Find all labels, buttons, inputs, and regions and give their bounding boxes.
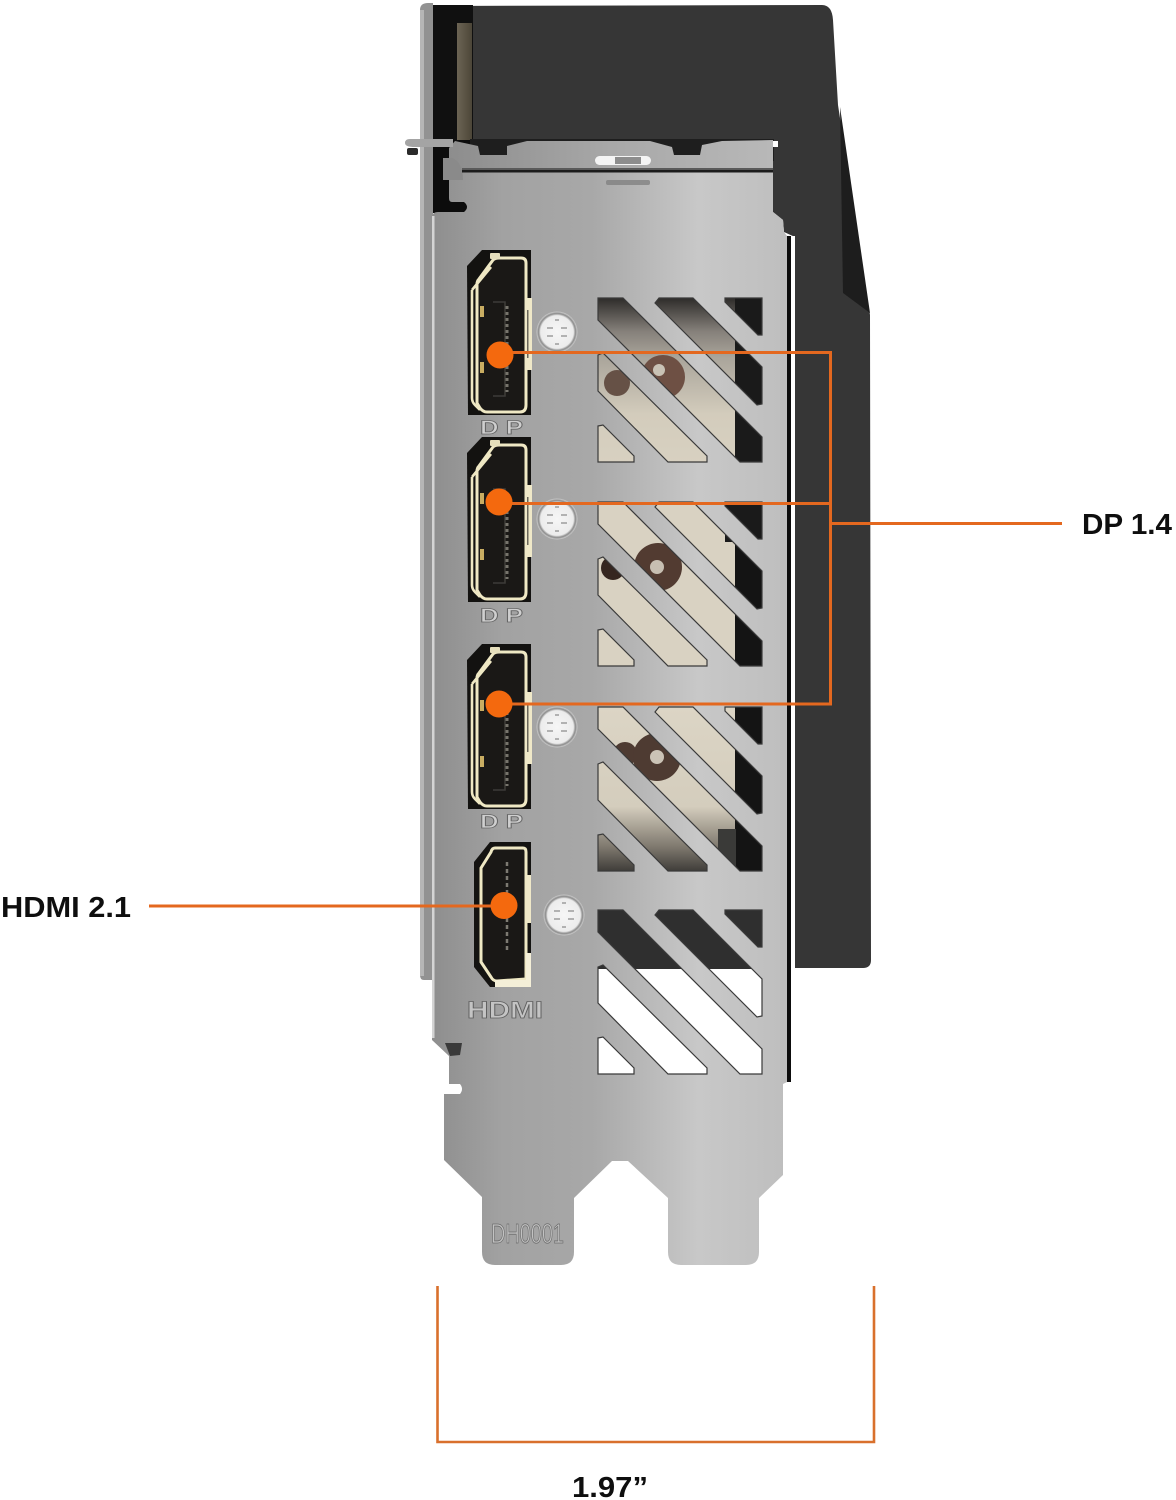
callout: HDMI 2.1 leader line and dot [149, 892, 518, 919]
engraved label DP 3: D P [480, 812, 523, 833]
engraved label HDMI: HDMI [467, 997, 543, 1024]
screw 2 [536, 498, 578, 540]
engraved label DP 1: D P [480, 418, 523, 439]
bracket top lip [405, 139, 778, 185]
graphics card cooler body [432, 5, 871, 968]
vent group 3 [596, 707, 765, 873]
label: DP 1.4: DP 1.4 [1082, 509, 1172, 541]
vent group 2 [596, 502, 765, 668]
engraved mark near left edge [445, 1043, 462, 1056]
vent group 4 [596, 910, 766, 1076]
DisplayPort connector 3 [467, 644, 532, 809]
screw 4 [544, 894, 584, 936]
vent group 1 [596, 298, 765, 464]
label: HDMI 2.1: HDMI 2.1 [1, 892, 131, 924]
engraved label DP 2: D P [480, 606, 523, 627]
screw 1 [536, 312, 578, 352]
DisplayPort connector 1 [467, 250, 532, 415]
dimension bracket [438, 1286, 874, 1442]
screw 3 [536, 706, 578, 748]
metal I/O bracket plate [405, 139, 787, 1265]
callout: DP 1.4 leader lines and dots [486, 342, 1062, 718]
DisplayPort connector 2 [467, 437, 532, 602]
HDMI connector [474, 842, 531, 987]
engraved label DH0001: DH0001 [491, 1218, 564, 1249]
black and white edge stripes [787, 236, 795, 1082]
left side strip [420, 3, 433, 980]
